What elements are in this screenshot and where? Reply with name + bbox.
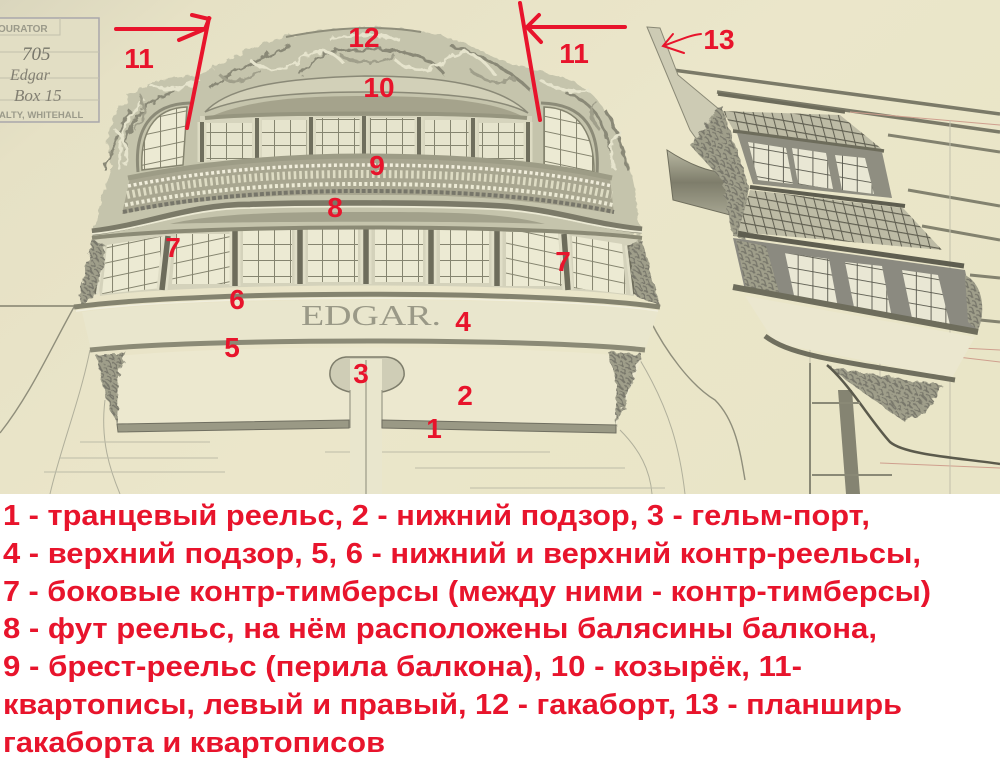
- rudder fittings: [810, 363, 892, 494]
- counter rail, upper: [74, 294, 660, 307]
- top lattice: [723, 111, 883, 150]
- helm port: [330, 357, 404, 392]
- caption text: 9 - брест-реельс (перила балкона), 10 - козырёк, 11-: [3, 651, 802, 683]
- lower gallery windows: [92, 228, 642, 296]
- side counter: [745, 296, 975, 378]
- rudder lines: [350, 360, 382, 494]
- crown carving: taffrail and quarter pieces: [92, 27, 640, 238]
- caption text: 4 - верхний подзор, 5, 6 - нижний и верхний контр-реельсы,: [3, 538, 921, 570]
- hull construction lines: [0, 306, 745, 494]
- side wing: [667, 150, 730, 215]
- number markers: 9: [369, 150, 385, 181]
- side scroll: [965, 275, 982, 330]
- dark soffit band under the hood: [212, 96, 522, 116]
- number markers: [124, 22, 735, 444]
- rudder post: [838, 390, 860, 494]
- number markers: 6: [229, 284, 245, 315]
- caption text: 7 - боковые контр-тимберсы (между ними - контр-тимберсы): [3, 576, 931, 608]
- number markers: 7: [555, 246, 571, 277]
- number markers: 13: [703, 24, 735, 55]
- number markers: 5: [224, 332, 240, 363]
- paper background of the ship draught: [0, 0, 1000, 494]
- stamp: curator box: ALTY, WHITEHALL: [0, 110, 83, 121]
- tiller curve: [827, 365, 1000, 464]
- number markers: 8: [327, 192, 343, 223]
- number markers: 11: [124, 43, 154, 74]
- rudder stock: [350, 359, 382, 494]
- stamp: curator box: Box 15: [14, 86, 62, 105]
- breast rail: [128, 156, 612, 178]
- number markers: 1: [426, 413, 442, 444]
- name board: EDGAR.: [301, 300, 441, 332]
- side counter rail: [765, 336, 955, 380]
- red arrow: left quarter piece: [116, 15, 209, 128]
- red arrow: planshir: [663, 34, 701, 53]
- frieze under foot rail: [170, 212, 545, 224]
- stamp: curator box: Edgar: [9, 67, 51, 84]
- balcony balusters: [122, 157, 614, 214]
- main stern view: [74, 27, 660, 494]
- stamp: curator box: 705: [22, 44, 50, 65]
- red arrow: right quarter piece: [520, 3, 625, 120]
- number markers: 3: [353, 358, 369, 389]
- caption text: гакаборта и квартописов: [3, 727, 385, 759]
- quarter gallery window, left: [137, 103, 190, 172]
- carved side pieces: [78, 240, 660, 306]
- number markers: 11: [559, 38, 589, 69]
- side view of the stern: [647, 27, 1000, 494]
- taffrail spike: [647, 27, 735, 172]
- corner carvings: [96, 352, 642, 425]
- upper rail: [718, 94, 884, 151]
- number markers: 12: [348, 22, 380, 53]
- number markers: 7: [165, 232, 181, 263]
- caption text: [3, 500, 931, 759]
- number markers: 2: [457, 380, 473, 411]
- lower side rail: [733, 287, 978, 332]
- caption text: квартописы, левый и правый, 12 - гакаборт, 13 - планширь: [3, 689, 902, 721]
- lower side carving: [828, 367, 942, 422]
- transom rail: [117, 420, 616, 433]
- number markers: 4: [455, 306, 471, 337]
- caption text: 1 - транцевый реельс, 2 - нижний подзор, 3 - гельм-порт,: [3, 500, 870, 532]
- second lattice: [738, 190, 942, 250]
- upper gallery windows: [200, 114, 532, 162]
- number markers: 10: [363, 72, 395, 103]
- counter: lower panel: [102, 348, 642, 424]
- caption text: 8 - фут реельс, на нём расположены балясины балкона,: [3, 613, 877, 645]
- stamp: curator box: [0, 18, 99, 122]
- quarter carving: [690, 105, 750, 240]
- lower side cornice: [738, 234, 964, 266]
- caption panel: [0, 494, 1000, 768]
- counter: upper panel: [82, 300, 658, 350]
- counter rail, lower: [90, 341, 645, 350]
- long rails running to the right: [673, 70, 1000, 132]
- lower side windows: [733, 238, 977, 330]
- quarter gallery window, right: [541, 103, 597, 174]
- foot rail: [92, 204, 642, 232]
- upper side windows: [737, 133, 892, 198]
